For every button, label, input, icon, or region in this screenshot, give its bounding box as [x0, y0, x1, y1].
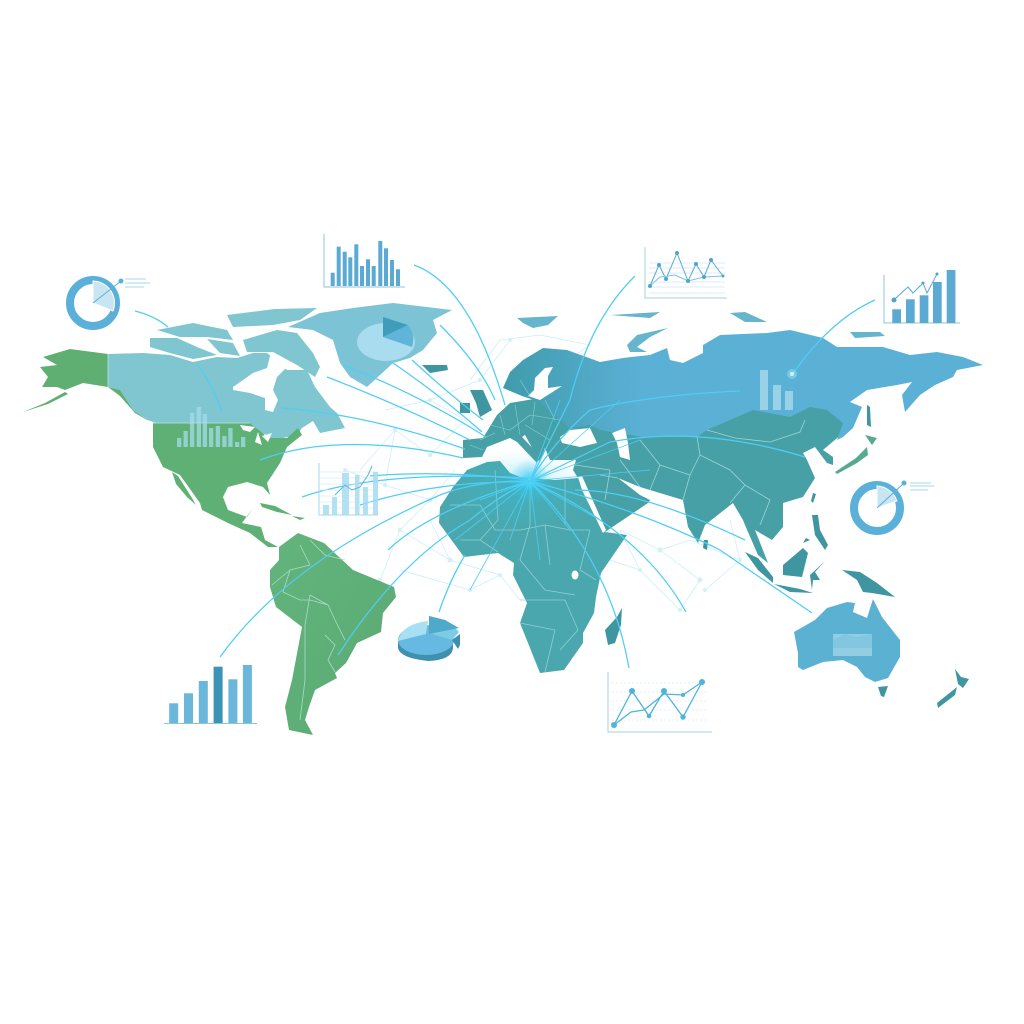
map: Europe and southern Asia [463, 330, 983, 563]
bar chart: bottom left [164, 665, 257, 724]
British Isles [460, 390, 492, 417]
Baltic Sea [528, 367, 562, 400]
pie chart on Greenland [357, 317, 415, 361]
Cuba and Caribbean [260, 503, 305, 520]
Madagascar [605, 608, 622, 645]
line chart: top right of centre [645, 247, 727, 298]
Black Sea [560, 428, 597, 447]
US Canada 49th parallel line [108, 354, 250, 423]
donut chart: right [854, 480, 934, 531]
3D pie chart [398, 616, 460, 661]
map: South America [270, 533, 396, 735]
Canada mainland [108, 353, 345, 440]
map: islands [460, 312, 969, 708]
Philippines [803, 515, 828, 550]
Svalbard and Arctic islands [517, 312, 885, 352]
Great Lakes [240, 425, 272, 445]
New Zealand [937, 669, 969, 708]
Java [774, 584, 813, 593]
Lake Victoria [572, 570, 578, 580]
Caspian Sea [612, 428, 630, 460]
country borders [450, 470, 596, 672]
combo chart: Atlantic [319, 463, 378, 515]
bar chart on Russia [760, 370, 793, 410]
faint network nodes over the oceans [343, 335, 742, 612]
country borders [272, 540, 345, 720]
map: Africa [439, 461, 627, 673]
map: North America [23, 303, 452, 547]
Taiwan [811, 493, 816, 503]
Mongolia and China borders [575, 420, 805, 525]
European border texture [470, 380, 560, 450]
Alaska [23, 349, 147, 420]
New Guinea [842, 570, 895, 597]
Greenland [288, 303, 452, 387]
hub glow [450, 450, 590, 530]
Russia and Kazakhstan [503, 330, 983, 440]
line chart: bottom right [608, 672, 712, 732]
mini area chart on Australia [833, 634, 872, 656]
bar and line chart: top right [884, 270, 960, 323]
bar chart on Canada and USA [177, 407, 245, 447]
USA and Mexico [153, 423, 302, 547]
Sulawesi [810, 561, 825, 590]
Baja California [172, 472, 196, 505]
map: Australia [794, 599, 900, 682]
Iceland [422, 365, 448, 373]
bar chart: top centre [324, 234, 405, 287]
node on Russia [787, 369, 797, 379]
Sakhalin [867, 405, 871, 427]
Japan [835, 435, 877, 474]
Sumatra [745, 552, 773, 583]
connector lines [135, 265, 875, 668]
Tasmania [878, 686, 888, 697]
Arctic islands [150, 308, 320, 377]
Borneo [783, 548, 808, 577]
donut chart: top left [70, 278, 150, 326]
Sri Lanka [703, 540, 708, 550]
Red Sea gap [578, 476, 606, 533]
Hudson Bay [233, 356, 287, 412]
